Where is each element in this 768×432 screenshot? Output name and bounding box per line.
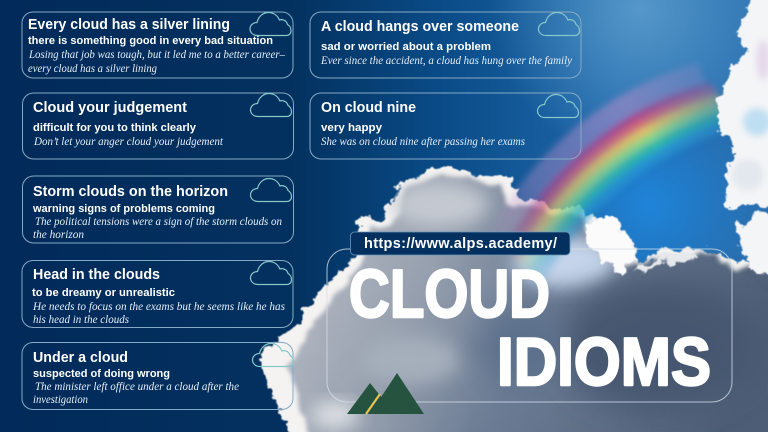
panel: under a cloud: The minister left office under a cloud after the (35, 379, 240, 393)
right clouds (716, 0, 768, 275)
panel: under a cloud: Under a cloud (33, 350, 128, 366)
panel: a cloud hangs over someone: sad or worried about a problem (321, 41, 491, 53)
panel: cloud your judgement (22, 93, 294, 159)
title: IDIOMS: IDIOMS (497, 324, 711, 400)
panel: on cloud nine (310, 93, 581, 159)
panel: storm clouds on the horizon: warning signs of problems coming (32, 203, 215, 215)
rainbow (500, 73, 737, 283)
panel: under a cloud: suspected of doing wrong (33, 368, 170, 380)
panel: every cloud has a silver lining: Every cloud has a silver lining (28, 17, 230, 33)
panel: head in the clouds: his head in the clouds (33, 312, 129, 326)
panel: cloud your judgement: Don’t let your anger cloud your judgement (33, 134, 224, 148)
panel: every cloud has a silver lining: every cloud has a silver lining (28, 61, 157, 75)
panel: on cloud nine: She was on cloud nine after passing her exams (321, 134, 525, 148)
panel: head in the clouds: He needs to focus on the exams but he seems like he has (32, 299, 285, 313)
white cloud puffs near the rainbow (583, 214, 700, 276)
logo: mountains (347, 373, 424, 414)
panel: a cloud hangs over someone (310, 12, 581, 78)
panel: head in the clouds (22, 260, 293, 328)
panel: under a cloud (22, 342, 294, 410)
panel: every cloud has a silver lining: there is something good in every bad situation (28, 35, 273, 47)
panel: cloud your judgement: Cloud your judgement (33, 100, 187, 116)
main cumulus cloud (260, 168, 768, 432)
panel: a cloud hangs over someone: Ever since the accident, a cloud has hung over the family (320, 53, 573, 67)
cloud shading (311, 183, 760, 429)
panel: every cloud has a silver lining: Losing that job was tough, but it led me to a better career– (28, 47, 286, 61)
title panel (327, 249, 732, 402)
panel: a cloud hangs over someone: A cloud hangs over someone (321, 19, 519, 35)
panel: under a cloud: investigation (33, 392, 88, 406)
panel: cloud your judgement: difficult for you to think clearly (33, 122, 197, 134)
panel: every cloud has a silver lining (22, 12, 293, 78)
panel: storm clouds on the horizon: the horizon (33, 227, 84, 241)
panel: storm clouds on the horizon (22, 176, 294, 243)
title: CLOUD: CLOUD (349, 256, 550, 332)
panel: storm clouds on the horizon: The political tensions were a sign of the storm clouds on (35, 214, 282, 228)
panel: on cloud nine: On cloud nine (321, 100, 416, 116)
panel: storm clouds on the horizon: Storm clouds on the horizon (33, 184, 228, 200)
panel: head in the clouds: Head in the clouds (33, 267, 160, 283)
panel: on cloud nine: very happy (321, 122, 383, 134)
website link badge (350, 232, 570, 255)
panel: head in the clouds: to be dreamy or unrealistic (32, 287, 175, 299)
website link badge: https://www.alps.academy/ (364, 236, 557, 252)
